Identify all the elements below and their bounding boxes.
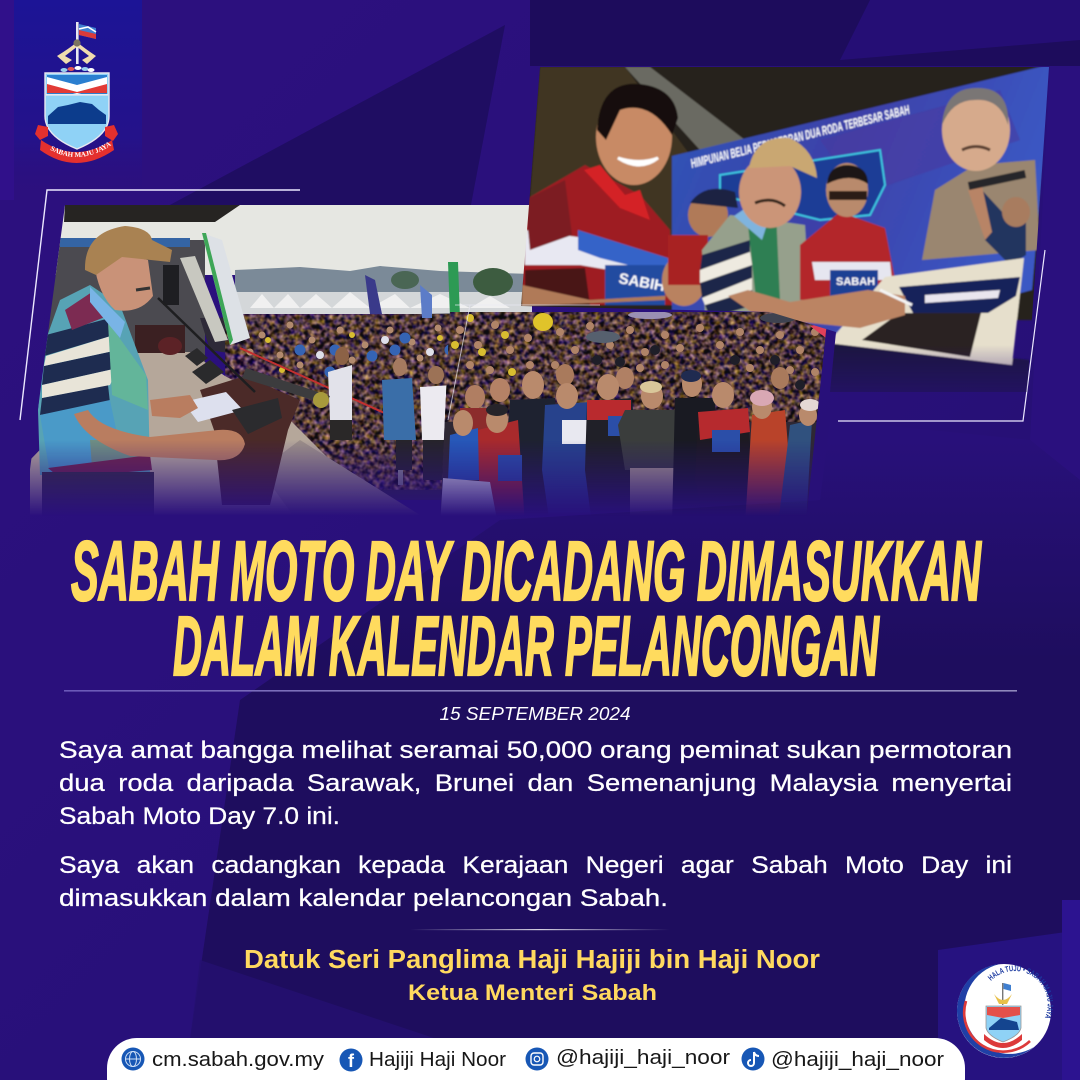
photo: jersey signing: [515, 60, 1055, 395]
speakers: [185, 348, 208, 366]
icon: motto ribbon: [35, 125, 118, 163]
body text paragraph 2: [59, 852, 1012, 912]
title: [71, 524, 982, 693]
icon: facebook: [340, 1048, 362, 1072]
man shirt: [38, 285, 150, 475]
man face: [94, 255, 153, 311]
title underline: [64, 690, 1017, 692]
frame accent lines: [448, 305, 600, 420]
icon: flag and arms: [57, 22, 96, 72]
badge: Hala Tuju: HALA TUJU • SABAH MAJU JAYA: [988, 966, 1054, 1018]
arm signing: [728, 290, 905, 328]
icon: shield: [45, 73, 109, 149]
instagram: @hajiji_haji_noor: [556, 1046, 730, 1069]
attribution name: Datuk Seri Panglima Haji Hajiji bin Haji Noor: [244, 946, 820, 974]
body text paragraph 1: Saya amat bangga melihat seramai 50,000 orang peminat sukan permotoran: [59, 737, 1012, 764]
body text paragraph 1: Sabah Moto Day 7.0 ini.: [59, 803, 340, 830]
motorbike: [135, 325, 185, 353]
mountains: [235, 266, 524, 292]
pen: [880, 290, 912, 305]
icon: facebook: f: [348, 1051, 355, 1071]
date: 15 SEPTEMBER 2024: [440, 704, 630, 724]
badge: Hala Tuju: [957, 964, 1054, 1058]
selfie man: [982, 192, 1027, 262]
tiktok: @hajiji_haji_noor: [771, 1048, 944, 1071]
photo frame lines: [20, 190, 1045, 421]
icon: globe: [122, 1048, 144, 1070]
icon: motto ribbon: SABAH MAJU JAYA: [50, 142, 112, 157]
photo: crowd group: [440, 311, 830, 525]
banners: [202, 233, 250, 345]
screen event logo: [720, 150, 885, 220]
photo: jersey signing: SABAH: [836, 276, 875, 288]
background man in cap: [687, 202, 729, 238]
photo: speaker at podium: [20, 205, 540, 525]
table: [830, 343, 1029, 392]
man with sunglasses: [800, 212, 897, 300]
website: cm.sabah.gov.my: [152, 1048, 325, 1071]
logo: Sabah coat of arms: [35, 22, 118, 163]
social bar: [107, 1038, 965, 1080]
screen headline: HIMPUNAN BELIA PERMOTORAN DUA RODA TERBESAR SABAH: [689, 102, 911, 171]
crowd colour dots: [246, 322, 442, 368]
crowd colour dots: [460, 325, 815, 372]
man trousers: [42, 472, 154, 511]
ceiling: [515, 60, 1055, 320]
icon: instagram: [526, 1048, 548, 1070]
front row heads: [453, 371, 817, 436]
group of people: [440, 364, 820, 525]
crowd: [200, 314, 450, 500]
tents: [235, 292, 532, 314]
crowd people: [328, 365, 352, 420]
red ribbon and post: [240, 347, 384, 414]
blue column behind logo: [14, 0, 142, 196]
body text paragraph 1: dua roda daripada Sarawak, Brunei dan Semenanjung Malaysia menyertai: [59, 770, 1012, 797]
photo: jersey signing: SABIH: [617, 270, 666, 295]
man in stripes: [702, 215, 810, 315]
stage floor and stairs: [30, 352, 327, 512]
screen portrait: [922, 160, 1040, 260]
man in red jersey left: [522, 165, 672, 305]
body text paragraph 2: Saya akan cadangkan kepada Kerajaan Negeri agar Sabah Moto Day ini: [59, 852, 1012, 879]
podium: [200, 376, 300, 505]
attribution role: Ketua Menteri Sabah: [408, 980, 657, 1005]
facebook: Hajiji Haji Noor: [369, 1048, 506, 1071]
stage back: [30, 240, 205, 365]
body text paragraph 1: [59, 737, 1012, 830]
sky: [20, 205, 540, 275]
divider: [410, 929, 670, 930]
icon: badge crest: [984, 983, 1022, 1048]
framed jersey: [828, 258, 1024, 365]
man arm: [74, 410, 245, 460]
umbrellas and helmets: [586, 331, 620, 343]
front row shirts: [508, 398, 556, 478]
body text paragraph 2: dimasukkan dalam kalendar pelancongan Sabah.: [59, 885, 668, 912]
icon: tiktok: [742, 1048, 764, 1070]
back row: [465, 385, 485, 409]
LED screen: [672, 64, 1052, 345]
